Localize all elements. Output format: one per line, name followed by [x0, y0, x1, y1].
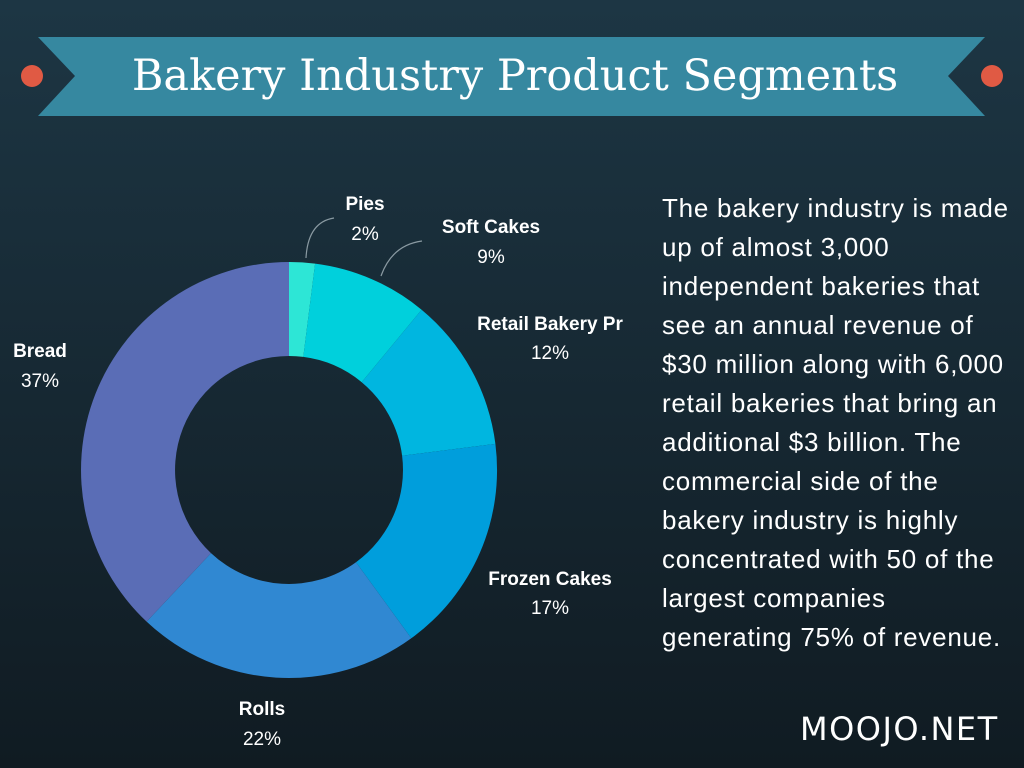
labels: 12%	[531, 343, 569, 364]
description text: up of almost 3,000	[662, 232, 889, 262]
labels	[13, 194, 623, 750]
leader lines	[306, 218, 422, 276]
brand: MOOJO.NET	[800, 710, 999, 748]
segment: Retail	[362, 310, 495, 456]
labels: 2%	[351, 224, 379, 245]
segment: Pies	[289, 262, 315, 357]
description text: $30 million along with 6,000	[662, 349, 1004, 379]
description text: The bakery industry is made	[662, 193, 1009, 223]
description text: largest companies	[662, 583, 886, 613]
segment: Soft Cakes	[303, 264, 422, 382]
donut chart	[13, 194, 623, 750]
description text	[662, 193, 1009, 652]
segment: Bread	[81, 262, 289, 622]
labels: Retail Bakery Pr	[477, 314, 623, 335]
description text: see an annual revenue of	[662, 310, 973, 340]
labels: 37%	[21, 371, 59, 392]
labels: Rolls	[239, 699, 285, 720]
title banner	[21, 37, 1003, 116]
description text: generating 75% of revenue.	[662, 622, 1001, 652]
labels: Pies	[345, 194, 385, 215]
description text: bakery industry is highly	[662, 505, 958, 535]
description text: additional $3 billion. The	[662, 427, 961, 457]
segment: Rolls	[147, 553, 411, 678]
description text: concentrated with 50 of the	[662, 544, 994, 574]
labels: Soft Cakes	[442, 217, 540, 238]
title banner: Bakery Industry Product Segments	[132, 51, 898, 101]
description text: independent bakeries that	[662, 271, 980, 301]
labels: 22%	[243, 729, 281, 750]
segment: Frozen Cakes	[356, 444, 497, 638]
labels: Frozen Cakes	[488, 569, 612, 590]
labels: Bread	[13, 341, 67, 362]
description text: commercial side of the	[662, 466, 939, 496]
labels: 9%	[477, 247, 505, 268]
labels: 17%	[531, 598, 569, 619]
description text: retail bakeries that bring an	[662, 388, 997, 418]
